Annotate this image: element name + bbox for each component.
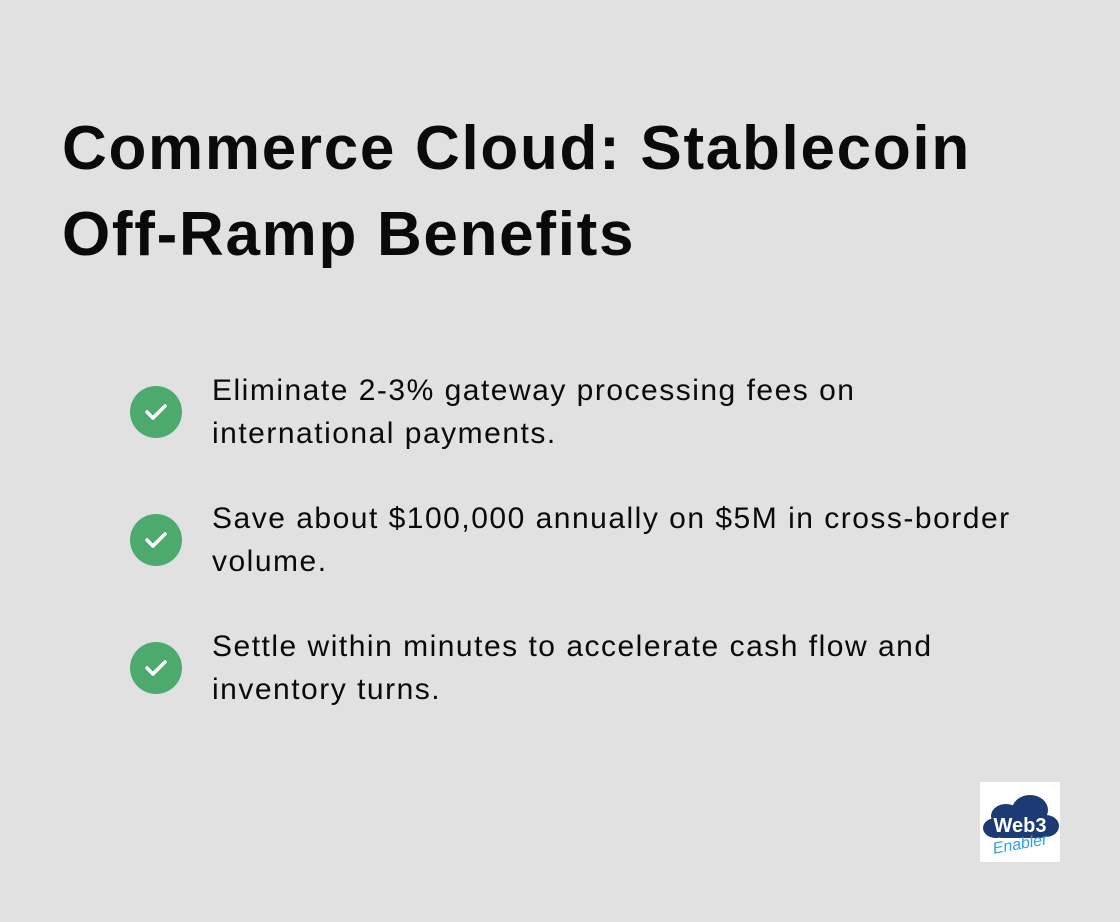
icon: check (130, 514, 182, 566)
title: Off-Ramp Benefits (62, 200, 635, 269)
text (212, 630, 933, 706)
text: volume. (212, 545, 328, 578)
logo (980, 782, 1060, 862)
logo: Web3 (994, 815, 1046, 837)
text: Eliminate 2-3% gateway processing fees on (212, 374, 855, 407)
title (62, 114, 971, 269)
item 3 (130, 630, 933, 706)
text (212, 502, 1011, 578)
text (212, 374, 855, 450)
text: Save about $100,000 annually on $5M in cross-border (212, 502, 1011, 535)
text: inventory turns. (212, 673, 441, 706)
text: international payments. (212, 417, 557, 450)
icon: check (130, 642, 182, 694)
icon: check (130, 386, 182, 438)
logo: Enabler (991, 831, 1049, 858)
title: Commerce Cloud: Stablecoin (62, 114, 971, 183)
item 1 (130, 374, 855, 450)
text: Settle within minutes to accelerate cash flow and (212, 630, 933, 663)
item 2 (130, 502, 1011, 578)
